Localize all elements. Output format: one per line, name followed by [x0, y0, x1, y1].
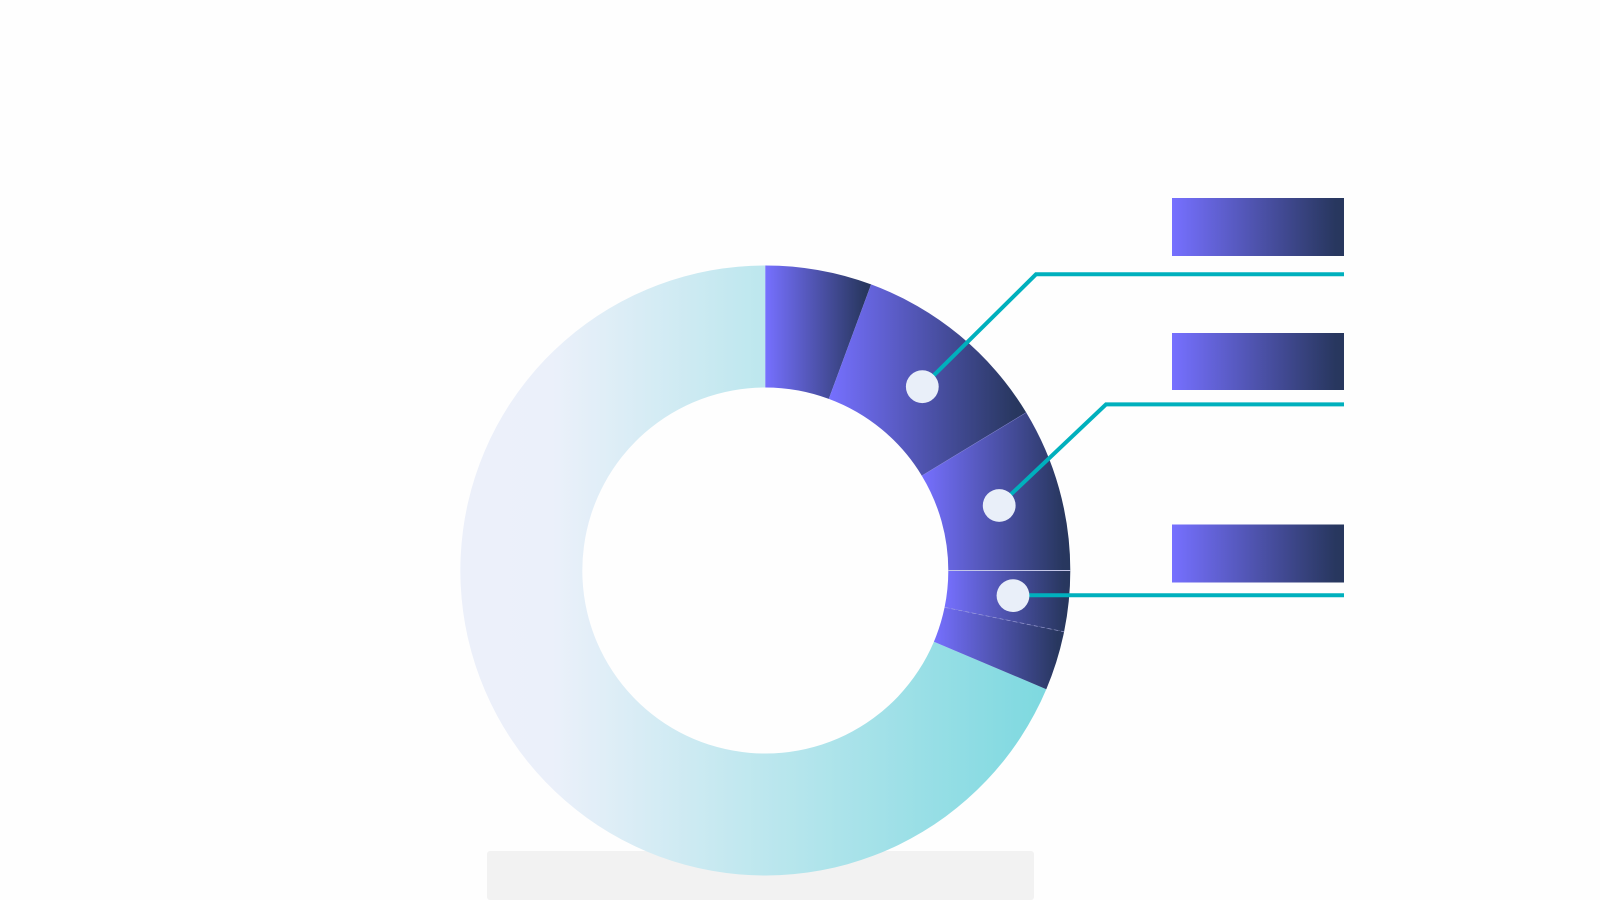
label bar 1: [1172, 198, 1344, 256]
label bar 3: [1172, 524, 1344, 582]
segment 3: [922, 412, 1070, 570]
leader line 2: [999, 404, 1344, 506]
marker dot 2: [983, 489, 1016, 522]
segment: large light share: [460, 266, 1046, 876]
segment 5: [934, 607, 1064, 689]
segment 2: [829, 284, 1026, 476]
marker dot 3: [997, 579, 1029, 612]
marker dot 1: [906, 370, 939, 403]
donut chart: [460, 265, 1070, 875]
leader line 3: [1013, 593, 1344, 597]
segment 1: [765, 265, 871, 399]
leader line 1: [922, 274, 1344, 387]
base panel: [487, 851, 1034, 900]
segment 4: [945, 570, 1070, 632]
label bar 2: [1172, 333, 1344, 390]
